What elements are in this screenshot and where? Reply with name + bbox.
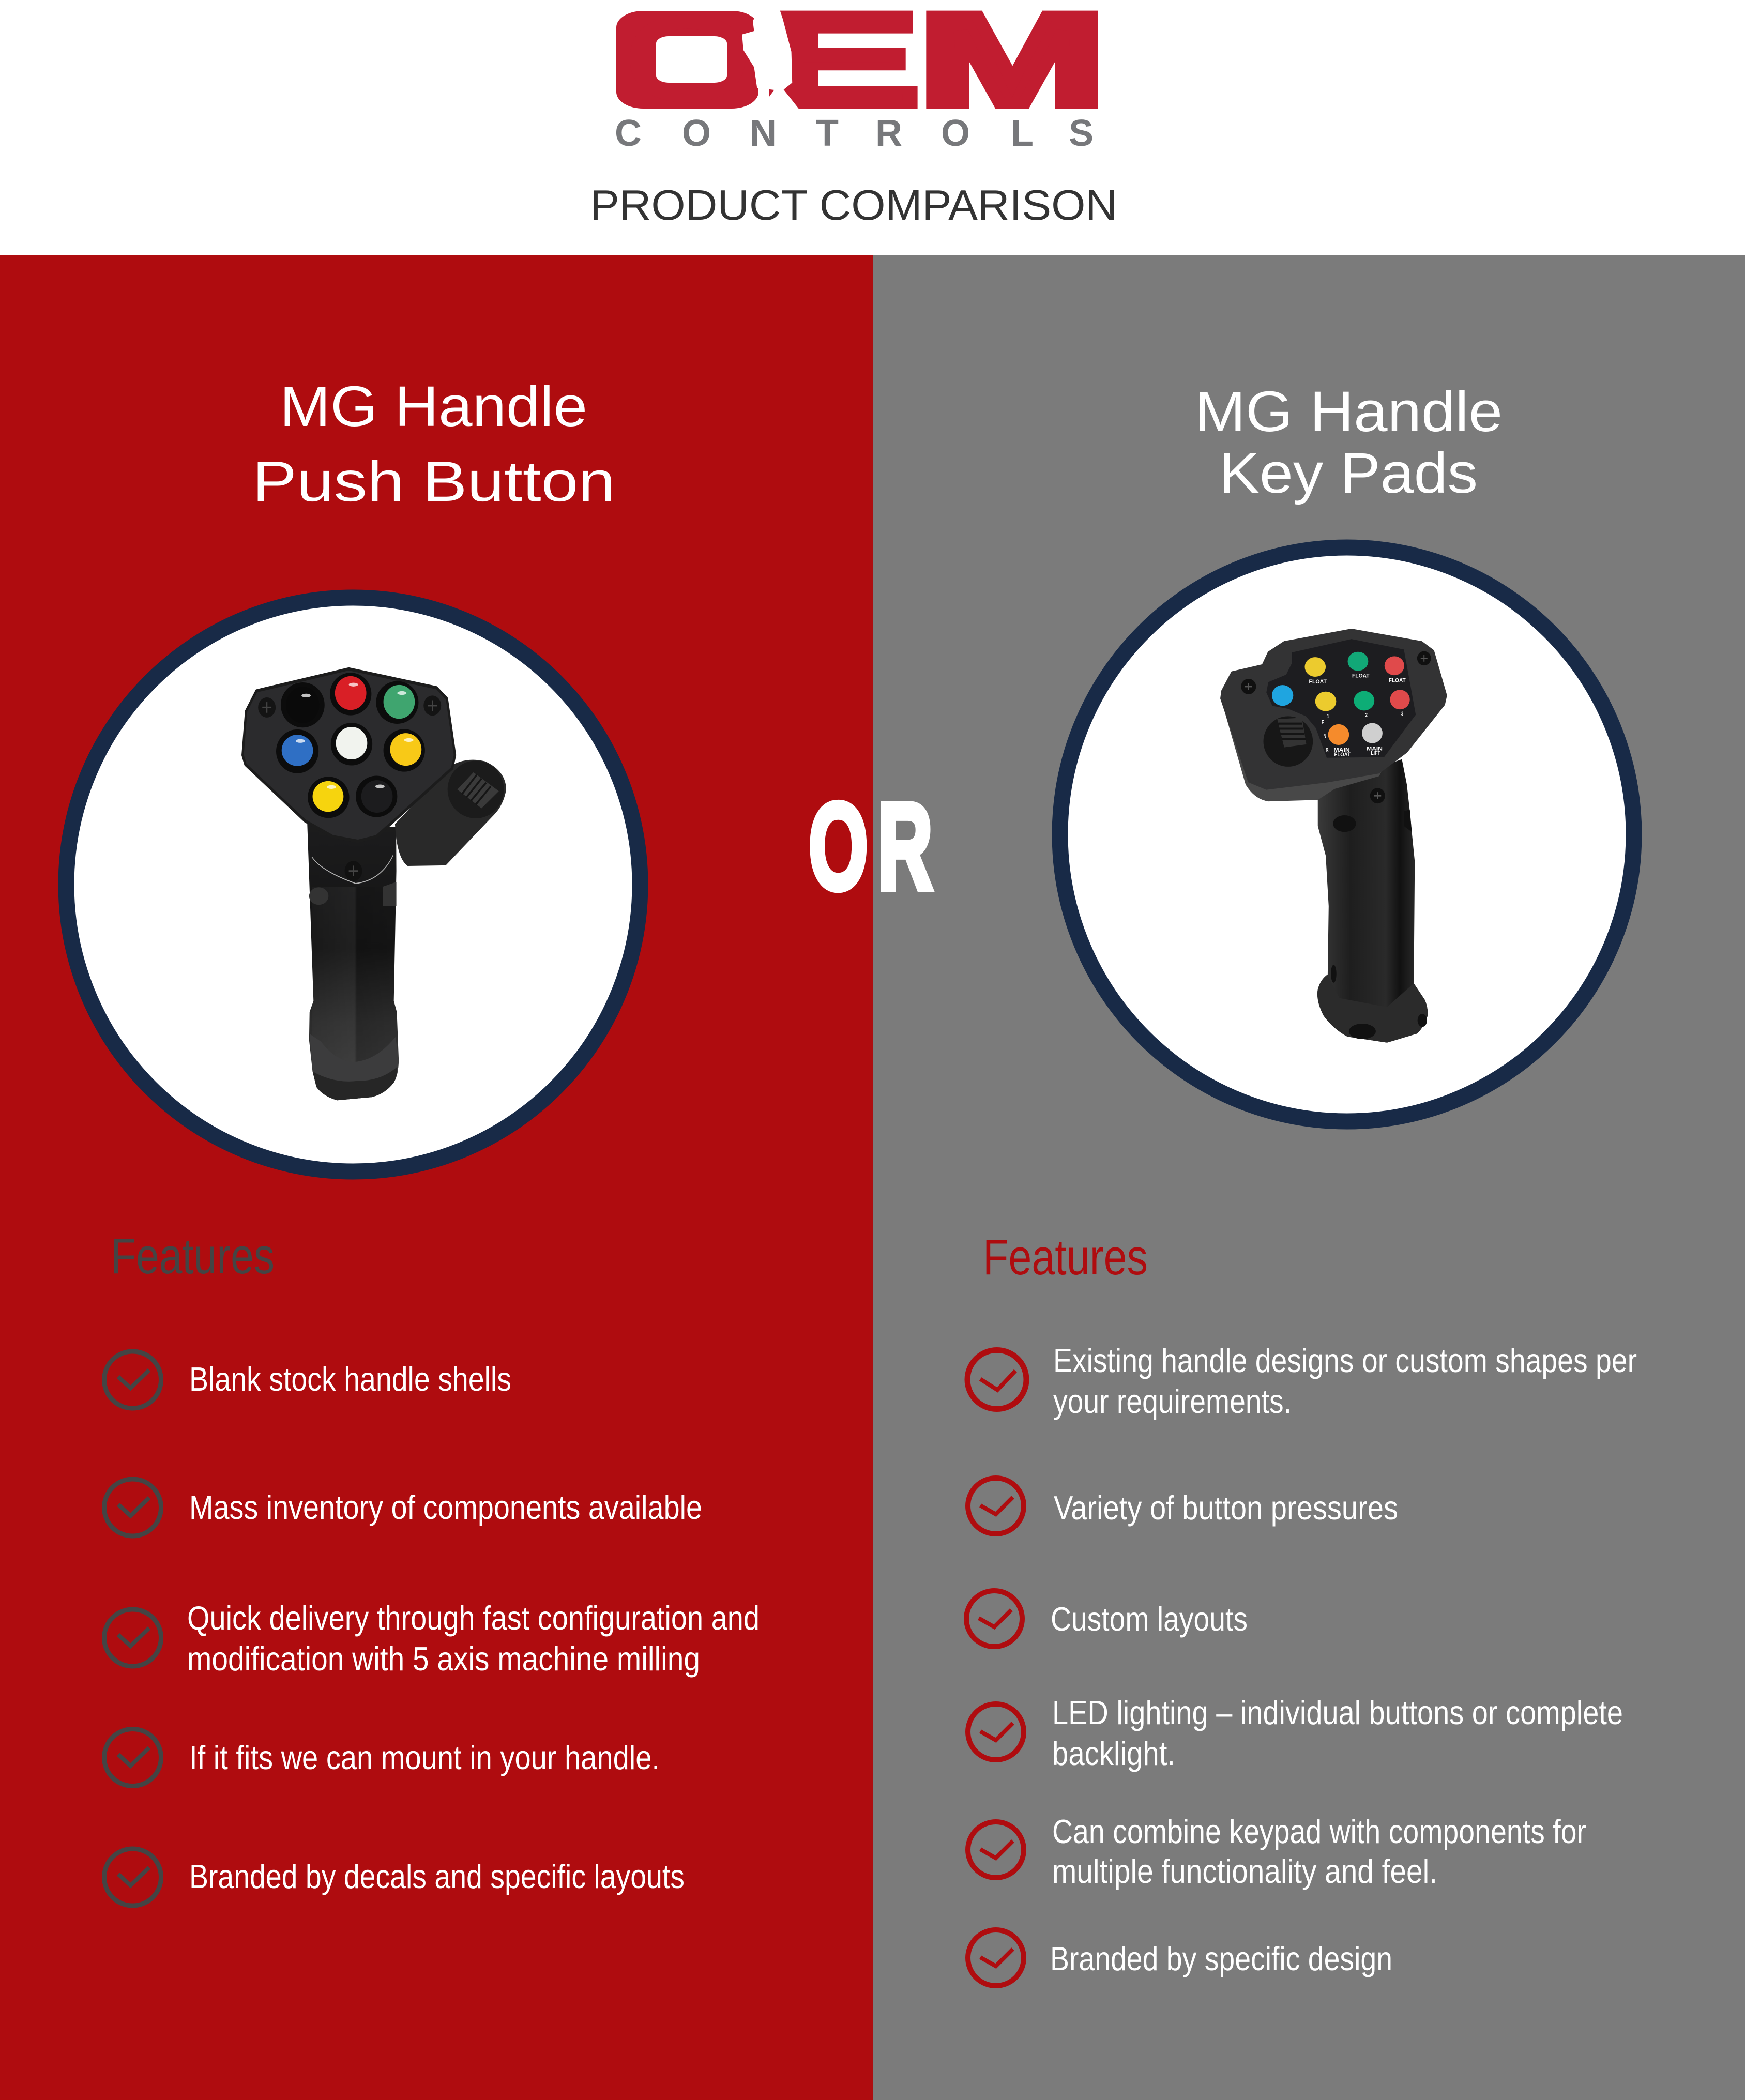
key labels: F: [1322, 719, 1324, 726]
grip seam: [312, 855, 393, 884]
logo joystick silhouette: [742, 9, 800, 110]
key labels: MAIN: [1367, 745, 1383, 752]
title: PRODUCT COMPARISON: [590, 181, 1117, 229]
logo O counter: [656, 36, 727, 83]
product circle left: [66, 598, 640, 1171]
feature: branded decals: Branded by decals and specific layouts: [189, 1858, 685, 1895]
grip details: [1331, 810, 1427, 1039]
key labels: N: [1323, 733, 1326, 740]
key labels: FLOAT: [1334, 751, 1351, 758]
feature: LED lighting: backlight.: [1052, 1734, 1175, 1772]
key labels: FLOAT: [1389, 677, 1406, 684]
key labels: 2: [1365, 712, 1368, 719]
plate screws: [1241, 651, 1431, 803]
feature: quick delivery: modification with 5 axis machine milling: [187, 1640, 700, 1678]
feature: combine keypad: multiple functionality and feel.: [1052, 1852, 1437, 1890]
feature: branded design: [968, 1930, 1392, 1986]
product: push button handle: [242, 669, 506, 1100]
button highlights: [296, 683, 414, 789]
feature: button pressures: Variety of button pressures: [1054, 1489, 1398, 1527]
feature: branded design: Branded by specific design: [1050, 1940, 1392, 1977]
heading: MG Handle Key Pads: Key Pads: [1219, 442, 1478, 505]
key labels: 1: [1327, 713, 1329, 720]
feature: branded decals: [104, 1849, 685, 1906]
membrane panel: [1266, 639, 1416, 758]
grip: [307, 824, 399, 1100]
feature: custom layouts: Custom layouts: [1051, 1600, 1248, 1638]
logo O block: [616, 11, 758, 109]
feature: blank shells: [104, 1351, 511, 1408]
base underside: [313, 1067, 397, 1100]
feature: LED lighting: LED lighting – individual buttons or complete: [1052, 1694, 1623, 1731]
feature: quick delivery: Quick delivery through fast configuration and: [187, 1599, 760, 1637]
mounting screw lower: [345, 861, 362, 881]
heading: MG Handle Key Pads: [1195, 380, 1503, 505]
thumb paddle: [395, 760, 506, 866]
logo wordmark CONTROLS: CONTROLS: [615, 113, 1094, 154]
feature list left: [104, 1351, 760, 1906]
grip base collar: [310, 1034, 399, 1100]
logo: OEM Controls: [615, 0, 1106, 154]
buttons: [282, 676, 421, 813]
feature: existing designs: Existing handle designs or custom shapes per: [1053, 1342, 1637, 1379]
key labels: R: [1326, 747, 1329, 754]
panel: push button: [0, 255, 873, 2100]
feature: existing designs: [967, 1342, 1637, 1420]
key buttons: [1272, 652, 1410, 745]
thumb roller: [448, 760, 504, 818]
header background: [0, 0, 1745, 255]
feature: combine keypad: Can combine keypad with components for: [1052, 1813, 1586, 1850]
heading: MG Handle Key Pads: MG Handle: [1195, 380, 1503, 444]
key labels: MAIN: [1333, 747, 1350, 754]
feature: LED lighting: [968, 1694, 1623, 1772]
key labels: FLOAT: [1309, 679, 1327, 686]
feature: combine keypad: [968, 1813, 1586, 1890]
key plate: [1221, 630, 1447, 789]
panel background gray: [873, 255, 1745, 2100]
product: key pad handle: [1221, 630, 1447, 1043]
grip: [1317, 759, 1428, 1043]
grip base collar: [1317, 976, 1428, 1043]
feature: quick delivery: [104, 1599, 760, 1678]
feature: fits handle: [104, 1729, 660, 1786]
features heading left: Features: [111, 1228, 275, 1284]
feature: button pressures: [968, 1478, 1398, 1534]
key labels: [1309, 673, 1406, 758]
plate screws: [258, 695, 441, 718]
panel background red: [0, 255, 873, 2100]
button plate: [242, 669, 455, 841]
feature: mass inventory: Mass inventory of components available: [189, 1488, 702, 1526]
feature: custom layouts: [966, 1591, 1248, 1647]
key labels: LIFT: [1371, 750, 1380, 756]
heading: MG Handle Push Button: Push Button: [252, 450, 615, 513]
grip side notches: [309, 882, 397, 906]
feature: existing designs: your requirements.: [1053, 1382, 1292, 1420]
feature: mass inventory: [104, 1479, 702, 1536]
feature list right: [966, 1342, 1637, 1986]
feature: blank shells: Blank stock handle shells: [189, 1360, 511, 1398]
OR divider text: OR: [809, 778, 933, 915]
logo wordmark OEM: [623, 0, 1106, 132]
heading: MG Handle Push Button: [252, 375, 615, 513]
heading: MG Handle Push Button: MG Handle: [280, 375, 587, 438]
roller knob: [1264, 716, 1313, 767]
product circle right: [1060, 547, 1634, 1121]
button bezels: [276, 673, 425, 818]
features heading right: Features: [983, 1229, 1148, 1285]
plate lower lip: [1221, 698, 1387, 801]
feature: fits handle: If it fits we can mount in your handle.: [189, 1739, 660, 1776]
key labels: FLOAT: [1352, 673, 1370, 679]
grip crease: [312, 887, 395, 1062]
panel: key pads: [873, 255, 1745, 2100]
key labels: 3: [1401, 711, 1404, 718]
